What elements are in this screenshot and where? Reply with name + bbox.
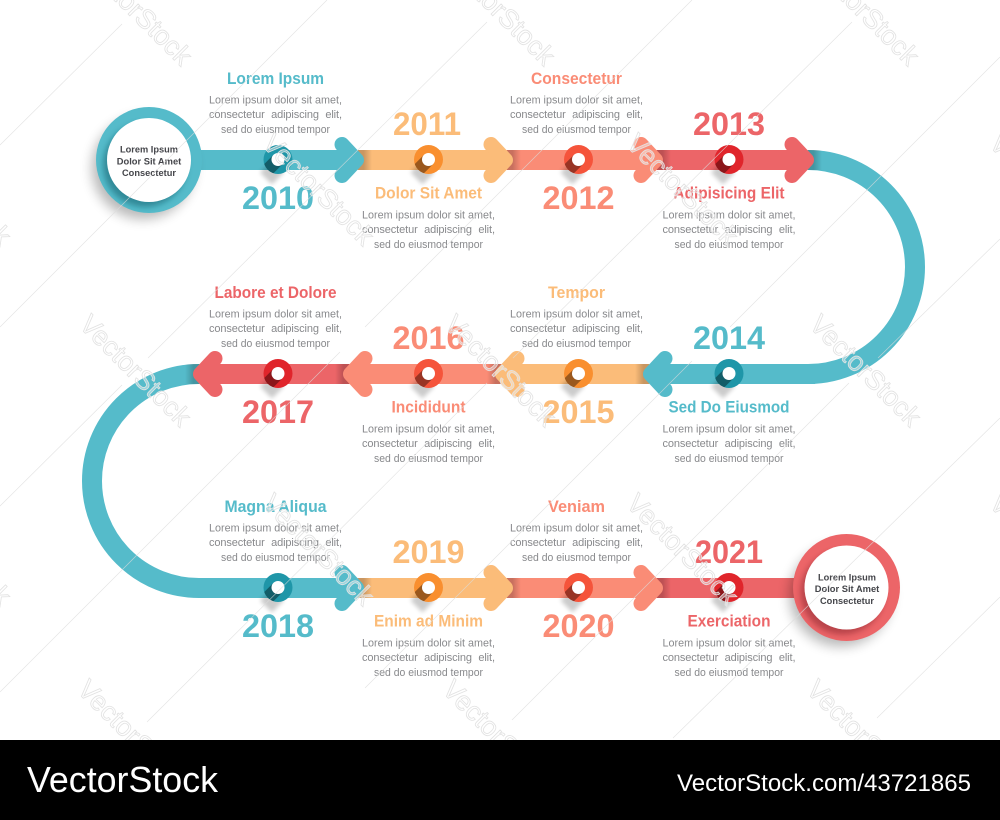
- arrow: 2010: [195, 144, 356, 176]
- text block: Exerciation: Exerciation: [688, 612, 770, 630]
- text block: Adipisicing Elit: Lorem ipsum dolor sit amet,: [662, 210, 796, 222]
- marker: 2014: [709, 359, 744, 398]
- text block: Magna Aliqua: Lorem ipsum dolor sit amet,: [209, 522, 342, 534]
- marker: 2010: [258, 145, 292, 184]
- start circle: [92, 107, 202, 219]
- text block: Tempor: [510, 284, 643, 350]
- arrow: 2015: [502, 358, 655, 390]
- text block: Magna Aliqua: Magna Aliqua: [224, 498, 327, 516]
- footer bar: [0, 740, 1000, 820]
- year: 2017: 2017: [242, 394, 314, 430]
- text block: Exerciation: sed do eiusmod tempor: [674, 667, 784, 679]
- text block: Adipisicing Elit: consectetur adipiscing elit,: [662, 224, 796, 236]
- year: 2019: 2019: [392, 534, 464, 570]
- text block: Enim ad Minim: consectetur adipiscing elit,: [362, 652, 495, 664]
- end circle: [790, 534, 900, 646]
- text block: Veniam: consectetur adipiscing elit,: [510, 537, 643, 549]
- start circle label: Dolor Sit Amet: [117, 156, 182, 168]
- text block: Dolor Sit Amet: sed do eiusmod tempor: [374, 239, 483, 251]
- marker: 2019: [408, 573, 443, 612]
- text block: Exerciation: Lorem ipsum dolor sit amet,: [662, 638, 796, 650]
- right curved connector: [650, 160, 915, 374]
- text block: Dolor Sit Amet: Dolor Sit Amet: [375, 184, 482, 202]
- text block: Tempor: consectetur adipiscing elit,: [510, 323, 643, 335]
- timeline row 3: [199, 572, 805, 604]
- year: 2018: 2018: [242, 608, 314, 644]
- text block: Labore et Dolore: Labore et Dolore: [214, 284, 336, 302]
- text block: Lorem Ipsum: consectetur adipiscing elit,: [209, 109, 342, 121]
- text block: Labore et Dolore: Lorem ipsum dolor sit amet,: [209, 308, 342, 320]
- text block: Incididunt: sed do eiusmod tempor: [374, 453, 483, 465]
- year: 2015: 2015: [542, 394, 614, 430]
- text block: Tempor: sed do eiusmod tempor: [522, 338, 631, 350]
- text block: Enim ad Minim: sed do eiusmod tempor: [374, 667, 483, 679]
- text block: Consectetur: [510, 70, 643, 136]
- text block: Sed Do Eiusmod: Sed Do Eiusmod: [668, 398, 790, 416]
- watermark: VectorStock: [437, 674, 560, 797]
- text block: Lorem Ipsum: sed do eiusmod tempor: [221, 124, 330, 136]
- text block: Labore et Dolore: consectetur adipiscing elit,: [209, 323, 342, 335]
- text block: Exerciation: [662, 612, 796, 679]
- text block: Consectetur: sed do eiusmod tempor: [522, 124, 631, 136]
- text block: Labore et Dolore: sed do eiusmod tempor: [221, 338, 330, 350]
- text block: Veniam: Veniam: [548, 498, 605, 516]
- timeline row 2: [92, 358, 815, 588]
- arrow: 2020: [505, 572, 656, 604]
- marker: 2017: [258, 359, 292, 398]
- text block: Tempor: Lorem ipsum dolor sit amet,: [510, 308, 643, 320]
- text block: Adipisicing Elit: Adipisicing Elit: [674, 184, 785, 202]
- marker: 2011: [408, 145, 443, 184]
- year: 2016: 2016: [392, 320, 464, 356]
- text block: Adipisicing Elit: sed do eiusmod tempor: [674, 239, 784, 251]
- text block: Exerciation: consectetur adipiscing elit,: [662, 652, 796, 664]
- text block: Tempor: Tempor: [548, 284, 606, 302]
- marker: 2016: [408, 359, 443, 398]
- end circle label: Lorem Ipsum: [818, 572, 876, 584]
- year: 2021: 2021: [695, 534, 763, 570]
- text block: Enim ad Minim: [362, 612, 495, 679]
- text block: Sed Do Eiusmod: [662, 398, 796, 465]
- text block: Consectetur: consectetur adipiscing elit,: [510, 109, 643, 121]
- start circle label: Consectetur: [122, 168, 176, 179]
- year: 2013: 2013: [693, 106, 765, 142]
- watermark: VectorStock: [621, 488, 744, 611]
- arrow: 2012: [505, 144, 656, 176]
- text block: Enim ad Minim: Lorem ipsum dolor sit amet,: [362, 638, 495, 650]
- text block: Dolor Sit Amet: Lorem ipsum dolor sit amet,: [362, 210, 495, 222]
- marker: 2020: [558, 573, 593, 612]
- marker: 2015: [558, 359, 593, 398]
- text block: Magna Aliqua: sed do eiusmod tempor: [221, 552, 330, 564]
- text block: Adipisicing Elit: [662, 184, 796, 251]
- year: 2010: 2010: [242, 180, 314, 216]
- text block: Consectetur: Consectetur: [531, 70, 623, 88]
- watermark: VectorStock: [621, 128, 744, 251]
- text block: Veniam: sed do eiusmod tempor: [522, 552, 631, 564]
- text block: Labore et Dolore: [209, 284, 342, 350]
- watermark: VectorStock: [804, 309, 927, 432]
- year: 2014: 2014: [693, 320, 765, 356]
- watermark: VectorStock: [257, 488, 380, 611]
- watermark: VectorStock: [72, 674, 195, 797]
- text block: Incididunt: consectetur adipiscing elit,: [362, 438, 495, 450]
- marker: 2021: [709, 573, 744, 612]
- text block: Veniam: Lorem ipsum dolor sit amet,: [510, 522, 643, 534]
- arrow: 2016: [350, 358, 505, 390]
- marker: 2012: [558, 145, 593, 184]
- text block: Lorem Ipsum: Lorem ipsum dolor sit amet,: [209, 94, 342, 106]
- text block: Sed Do Eiusmod: Lorem ipsum dolor sit amet,: [662, 424, 796, 436]
- watermark: VectorStock: [257, 128, 380, 251]
- text block: Dolor Sit Amet: [362, 184, 495, 251]
- marker: 2018: [258, 573, 292, 612]
- marker: 2013: [709, 145, 744, 184]
- start circle label: Lorem Ipsum: [120, 144, 178, 156]
- start circle label: [117, 144, 182, 179]
- end circle label: [815, 572, 880, 607]
- arrow: 2018: [199, 572, 356, 604]
- text block: Lorem Ipsum: Lorem Ipsum: [227, 70, 324, 88]
- left curved connector: [92, 374, 355, 588]
- text block: Magna Aliqua: consectetur adipiscing elit,: [209, 537, 342, 549]
- text block: Incididunt: Lorem ipsum dolor sit amet,: [362, 424, 495, 436]
- text block: Dolor Sit Amet: consectetur adipiscing elit,: [362, 224, 495, 236]
- footer logo: VectorStock: [27, 759, 219, 800]
- arrow: 2021: [655, 578, 805, 598]
- text block: Sed Do Eiusmod: consectetur adipiscing elit,: [662, 438, 796, 450]
- year: 2012: 2012: [542, 180, 614, 216]
- watermark: VectorStock: [74, 309, 197, 432]
- text block: Magna Aliqua: [209, 498, 342, 564]
- arrow: 2011: [355, 144, 506, 176]
- end circle label: Dolor Sit Amet: [815, 584, 880, 595]
- text block: Veniam: [510, 498, 643, 564]
- footer url: VectorStock.com/43721865: [677, 770, 971, 797]
- text block: Consectetur: Lorem ipsum dolor sit amet,: [510, 94, 643, 106]
- year: 2011: 2011: [393, 106, 461, 142]
- arrow: 2014: [650, 358, 815, 390]
- watermark: VectorStock: [439, 309, 562, 432]
- watermark: VectorStock: [801, 674, 924, 797]
- arrow: 2019: [355, 572, 506, 604]
- text block: Enim ad Minim: Enim ad Minim: [374, 612, 483, 630]
- text block: Incididunt: [362, 398, 495, 465]
- arrow: 2013: [655, 144, 806, 176]
- text block: Incididunt: Incididunt: [392, 398, 466, 416]
- text block: Sed Do Eiusmod: sed do eiusmod tempor: [674, 453, 784, 465]
- text block: Lorem Ipsum: [209, 70, 342, 136]
- timeline row 1: [195, 144, 915, 374]
- arrow: 2017: [200, 358, 350, 390]
- year: 2020: 2020: [542, 608, 614, 644]
- end circle label: Consectetur: [820, 596, 874, 607]
